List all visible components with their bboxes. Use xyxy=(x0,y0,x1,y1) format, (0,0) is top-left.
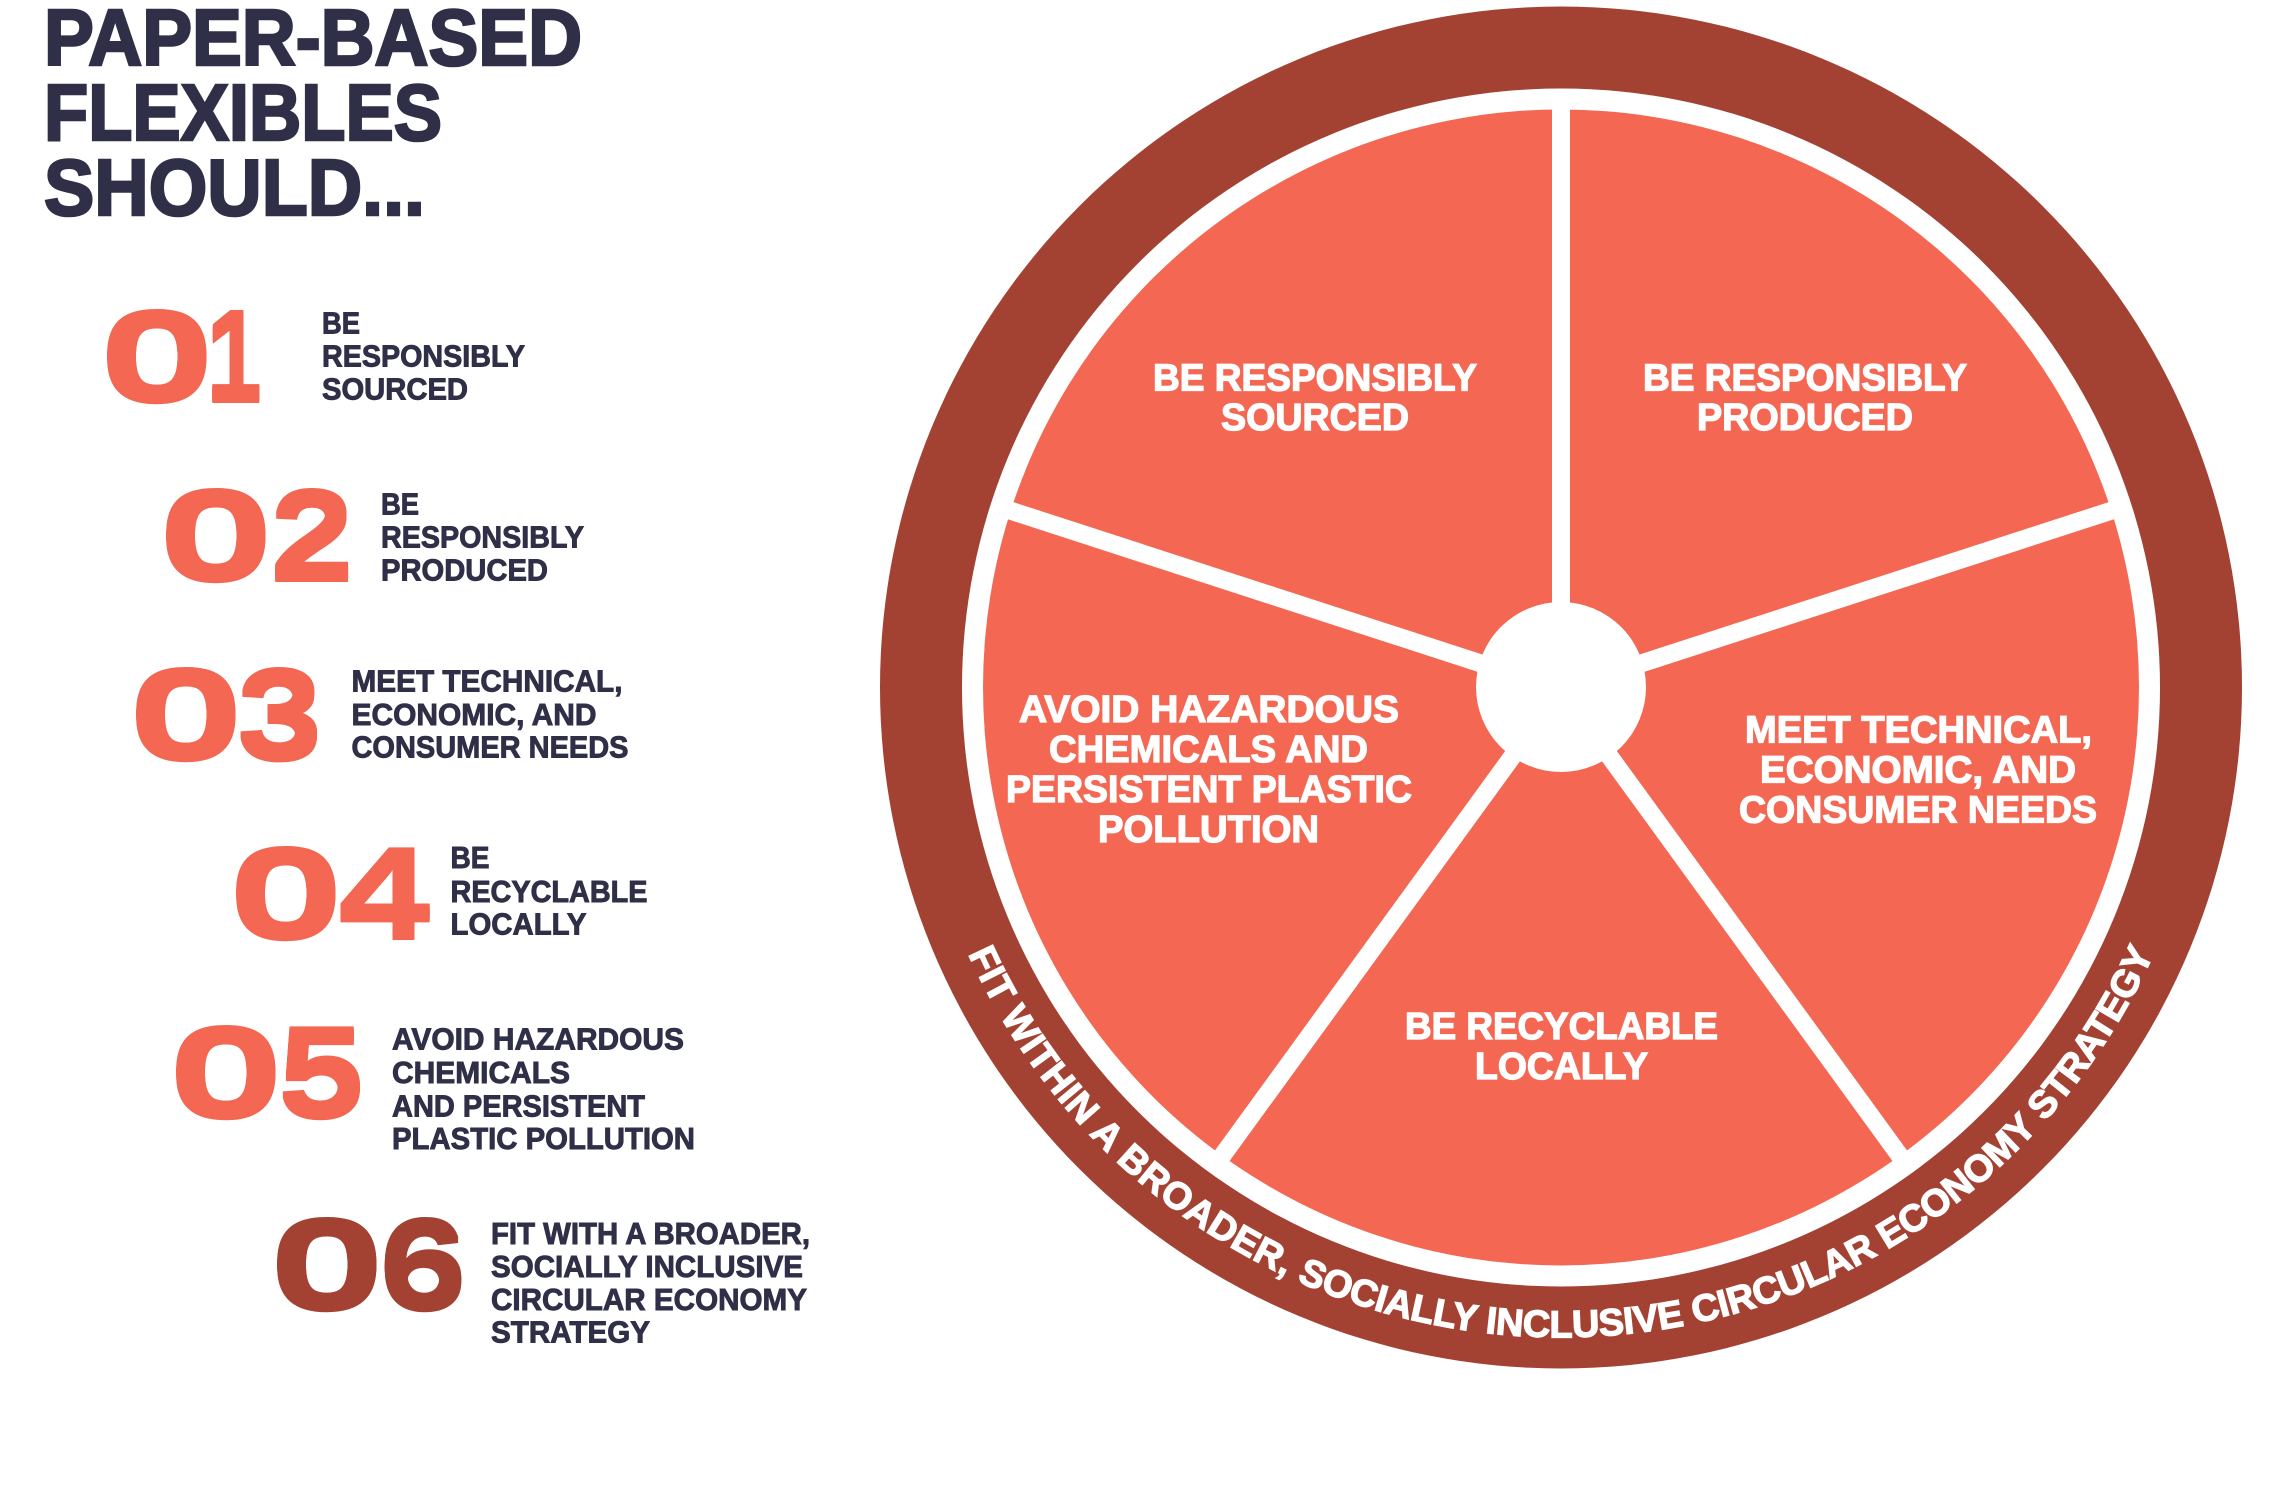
center hub xyxy=(1476,602,1646,772)
slice: avoid hazardous chemicals and persistent plastic pollution: CHEMICALS AND xyxy=(1049,729,1368,771)
text: item 04: RECYCLABLE xyxy=(450,875,648,909)
number 02: 0 xyxy=(158,465,274,606)
number 02 xyxy=(158,465,354,606)
number 04: 0 xyxy=(228,823,344,964)
number 04 xyxy=(228,823,430,964)
text: item 06: CIRCULAR ECONOMY xyxy=(491,1283,807,1317)
number 03: 0 xyxy=(128,644,244,785)
text: item 03 xyxy=(352,665,628,765)
text: item 06: FIT WITH A BROADER, xyxy=(491,1217,810,1251)
text: item 03: CONSUMER NEEDS xyxy=(352,731,628,765)
number 01: 1 xyxy=(206,286,262,427)
outer ring with curved label: FIT WITHIN A BROADER, SOCIALLY INCLUSIVE CIRCULAR ECONOMY STRATEGY xyxy=(968,942,2151,1338)
outer ring with curved label xyxy=(880,6,2242,1368)
text: item 05 xyxy=(392,1022,695,1156)
slice: avoid hazardous chemicals and persistent plastic pollution: AVOID HAZARDOUS xyxy=(1019,689,1399,731)
slice: be recyclable locally xyxy=(1221,688,1901,1265)
text: item 01: RESPONSIBLY xyxy=(322,340,525,374)
title: SHOULD... xyxy=(44,143,425,232)
text: item 06 xyxy=(491,1217,810,1350)
text: item 03: ECONOMIC, AND xyxy=(352,698,596,732)
number 06: 6 xyxy=(379,1194,467,1335)
text: item 02: RESPONSIBLY xyxy=(381,521,584,555)
slice: be responsibly sourced: SOURCED xyxy=(1221,397,1409,439)
text: item 05: AVOID HAZARDOUS xyxy=(392,1022,684,1056)
number 01: 0 xyxy=(99,286,215,427)
number 05: 5 xyxy=(278,1002,364,1143)
slice: meet technical, economic, and consumer needs xyxy=(1561,509,2139,1155)
number 04: 4 xyxy=(338,823,430,964)
text: item 04: LOCALLY xyxy=(450,908,586,942)
text: item 01: SOURCED xyxy=(322,372,468,406)
slice: meet technical, economic, and consumer needs: CONSUMER NEEDS xyxy=(1739,790,2097,832)
slice: avoid hazardous chemicals and persistent plastic pollution: POLLUTION xyxy=(1098,809,1319,851)
text: item 02: BE xyxy=(381,487,419,521)
slice: avoid hazardous chemicals and persistent plastic pollution xyxy=(983,509,1561,1155)
text: item 01: BE xyxy=(322,306,360,340)
title: FLEXIBLES xyxy=(44,68,442,157)
slice: be recyclable locally: BE RECYCLABLE xyxy=(1405,1006,1718,1048)
title xyxy=(44,0,582,232)
number 06 xyxy=(269,1194,467,1335)
number 03 xyxy=(128,644,323,785)
number 06: 0 xyxy=(269,1194,385,1335)
slice: meet technical, economic, and consumer needs: MEET TECHNICAL, xyxy=(1745,710,2092,752)
number 05 xyxy=(168,1002,364,1143)
text: item 03: MEET TECHNICAL, xyxy=(352,665,622,699)
number 03: 3 xyxy=(237,644,323,785)
slice: avoid hazardous chemicals and persistent plastic pollution: PERSISTENT PLASTIC xyxy=(1006,769,1412,811)
text: item 06: STRATEGY xyxy=(491,1316,650,1350)
slice: be responsibly sourced xyxy=(1011,110,1561,688)
text: item 05: AND PERSISTENT xyxy=(392,1090,645,1124)
slice: be responsibly produced xyxy=(1561,110,2111,688)
text: item 01 xyxy=(322,306,525,406)
text: item 04: BE xyxy=(450,841,490,875)
slice: be responsibly sourced: BE RESPONSIBLY xyxy=(1153,358,1477,400)
text: item 02 xyxy=(381,487,584,588)
slice: be recyclable locally: LOCALLY xyxy=(1475,1046,1648,1088)
slice: meet technical, economic, and consumer needs: ECONOMIC, AND xyxy=(1760,750,2076,792)
wheel diagram xyxy=(880,6,2242,1368)
number 05: 0 xyxy=(168,1002,284,1143)
number 02: 2 xyxy=(270,465,354,606)
text: item 05: CHEMICALS xyxy=(392,1056,570,1090)
text: item 06: SOCIALLY INCLUSIVE xyxy=(491,1250,803,1284)
text: item 02: PRODUCED xyxy=(381,554,548,588)
slice: be responsibly produced: PRODUCED xyxy=(1697,397,1913,439)
text: item 05: PLASTIC POLLUTION xyxy=(392,1122,695,1156)
slice: be responsibly produced: BE RESPONSIBLY xyxy=(1643,358,1967,400)
text: item 04 xyxy=(450,841,648,942)
